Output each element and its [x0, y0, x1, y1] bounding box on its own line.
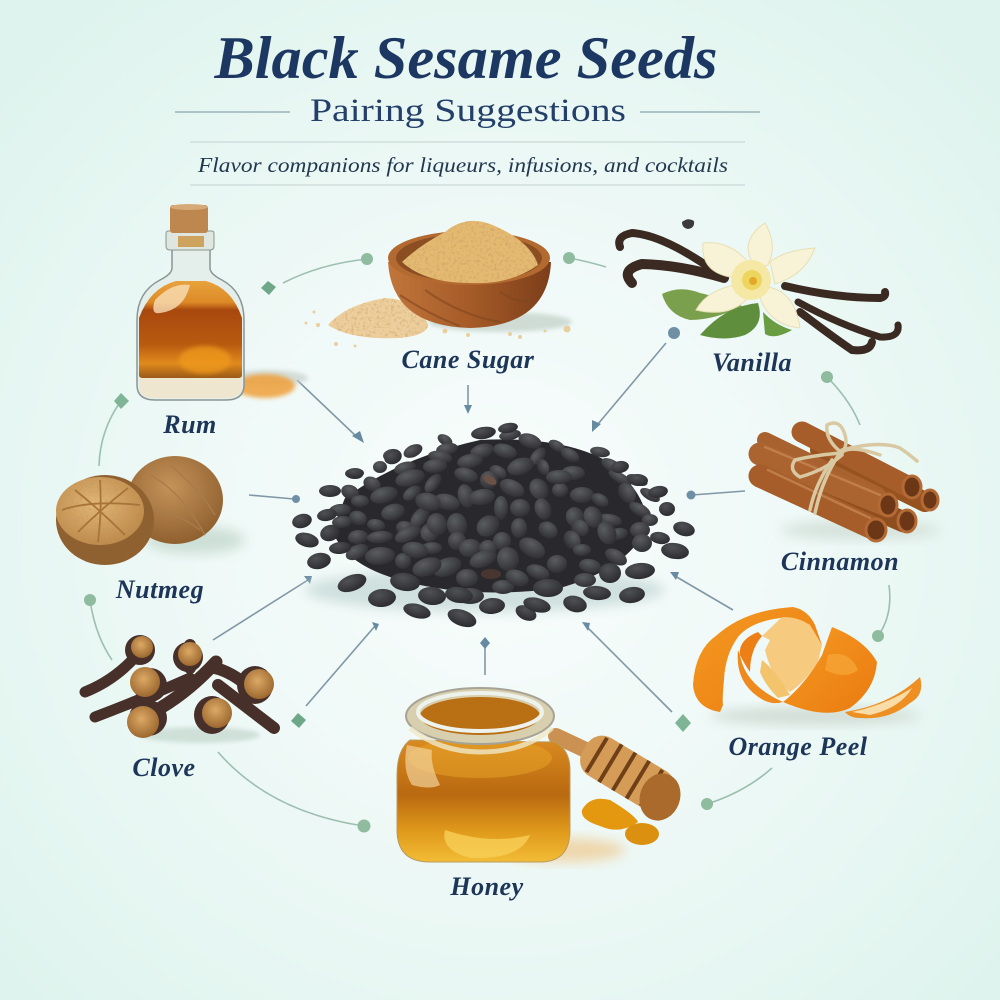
ingredient: clove: [85, 635, 274, 782]
label: rum: Rum: [162, 410, 217, 439]
subtitle: Pairing Suggestions: [310, 93, 626, 129]
icon: orange peel curl: [693, 607, 921, 725]
ingredient: nutmeg: [56, 456, 245, 604]
icon: cloves: [85, 635, 274, 743]
icon: sugar bowl: [304, 221, 572, 348]
ingredient: rum: [137, 204, 308, 439]
label: cinnamon: Cinnamon: [781, 547, 899, 576]
ingredient: cinnamon: [760, 423, 940, 576]
label: cane sugar: Cane Sugar: [402, 345, 535, 374]
label: nutmeg: Nutmeg: [115, 575, 204, 604]
icon: vanilla pods and flower: [619, 219, 898, 350]
arrows pointing to the seeds: [213, 327, 745, 712]
label: orange peel: Orange Peel: [728, 732, 868, 761]
ingredient: cane sugar: [304, 221, 572, 374]
icon: honey jar and dipper: [397, 688, 687, 862]
tagline: Flavor companions for liqueurs, infusions, and cocktails: [197, 153, 728, 177]
title: Black Sesame Seeds: [213, 25, 718, 91]
ingredient: orange peel: [693, 607, 921, 761]
icon: cinnamon bundle: [760, 423, 940, 541]
label: vanilla: Vanilla: [712, 348, 792, 377]
icon: rum bottle: [137, 204, 308, 400]
icon: nutmegs: [56, 456, 245, 565]
ingredient: honey: [397, 688, 687, 901]
connector arcs between ingredients: [84, 252, 890, 832]
central pile of black sesame seeds: [291, 421, 696, 631]
label: clove: Clove: [132, 753, 196, 782]
label: honey: Honey: [449, 872, 524, 901]
ingredient: vanilla: [619, 219, 898, 377]
